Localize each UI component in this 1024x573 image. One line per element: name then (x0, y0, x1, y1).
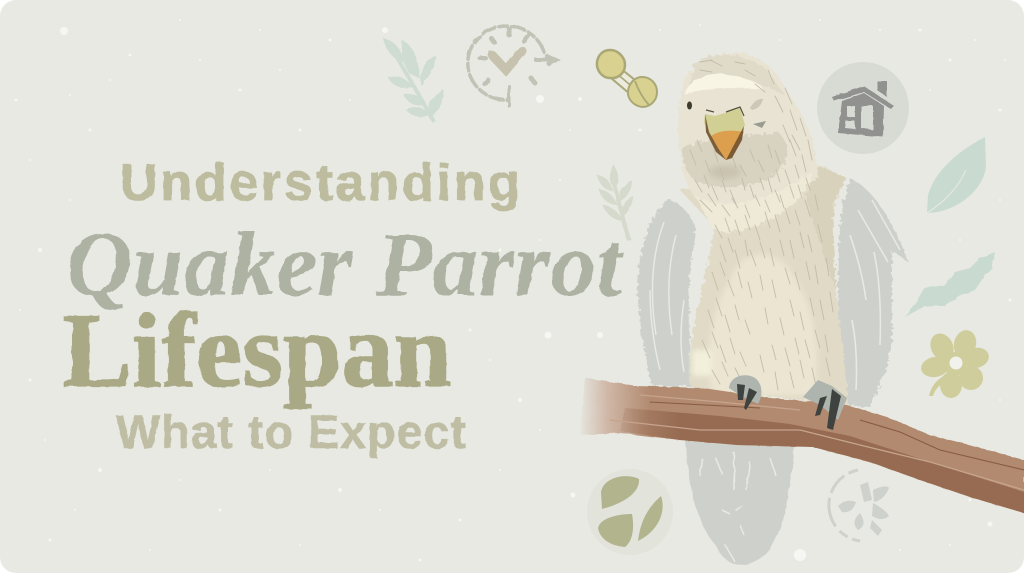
icon: dumbbell toy (597, 50, 657, 107)
icon: feather lower (905, 252, 995, 317)
crown shade (690, 55, 785, 95)
right wing feather gaps (850, 200, 900, 390)
heading: Lifespan: Lifespan (62, 292, 452, 409)
icon: green sprig top (385, 40, 442, 122)
branch dark underside (620, 408, 1024, 513)
body light belly (709, 254, 817, 395)
icon: dashed ring with leaves (829, 470, 889, 541)
heading: Quaker Parrot: Quaker Parrot (66, 213, 624, 315)
left claw (729, 375, 761, 410)
cheek mark (750, 99, 763, 110)
icon: clock with check mark (468, 26, 556, 106)
body (680, 165, 848, 405)
heading: What to Expect: What to Expect (116, 405, 466, 458)
right eye wink (753, 121, 766, 128)
left wing (638, 199, 695, 386)
left eye (687, 102, 692, 110)
icon: house badge (817, 62, 909, 154)
title (62, 154, 624, 458)
right claw (803, 380, 847, 430)
neck ruff highlight (696, 172, 812, 232)
tail (685, 440, 794, 565)
lower left pale patch (692, 350, 712, 376)
throat shade (682, 132, 787, 187)
right wing (838, 178, 908, 408)
icon: flower (919, 328, 991, 398)
head (678, 53, 818, 218)
chin dark smudge (709, 165, 741, 179)
icon: feather upper (927, 137, 986, 213)
forehead highlight (684, 74, 763, 94)
beak (704, 107, 745, 160)
icon: leaves badge (587, 469, 673, 555)
branch (580, 378, 1024, 513)
icon: small pale sprig (598, 166, 632, 240)
left wing streaks (650, 222, 684, 372)
parrot (638, 53, 908, 565)
branch grain lines (610, 395, 1024, 490)
heading: Understanding: Understanding (120, 154, 520, 212)
feather strokes (690, 60, 833, 390)
right shoulder shade (806, 165, 846, 290)
